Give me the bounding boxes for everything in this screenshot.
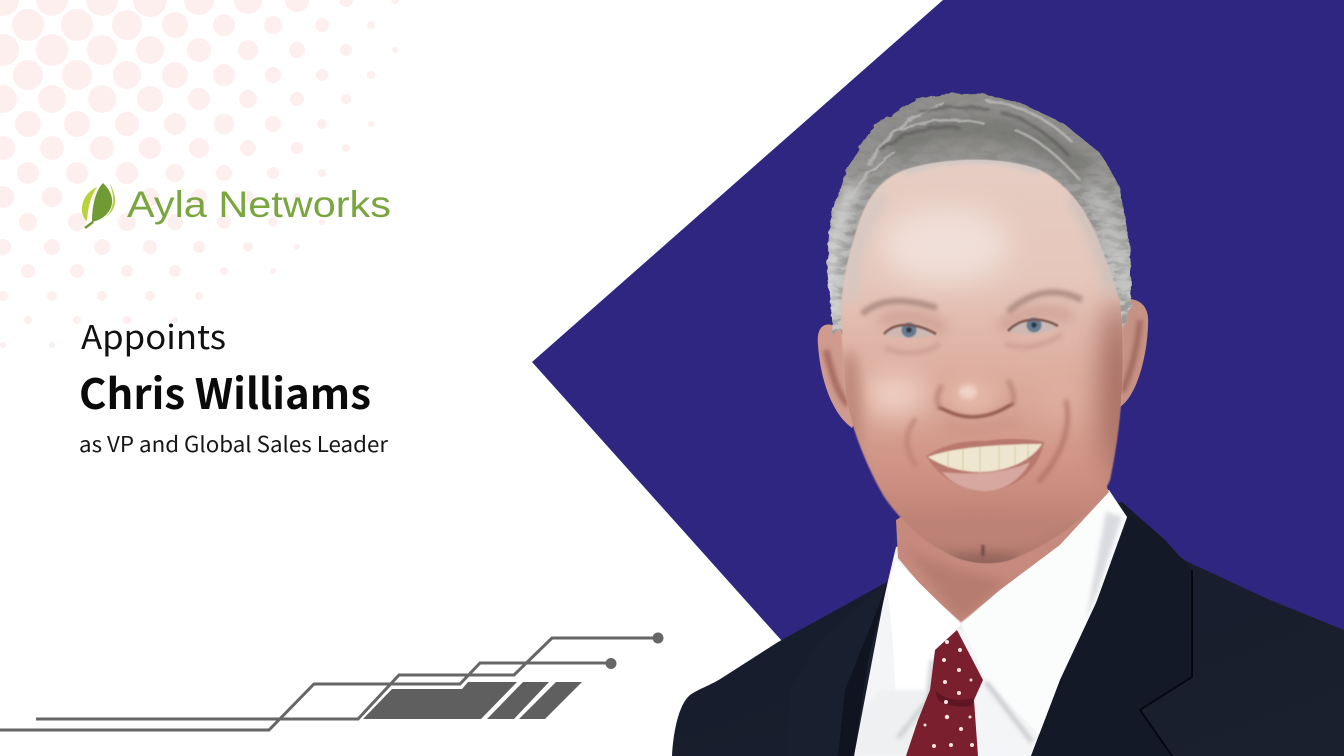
- navy diamond panel: [532, 0, 1344, 756]
- eyes: [884, 318, 1058, 338]
- logo: Ayla Networks: [82, 183, 391, 228]
- left lapel: [786, 582, 887, 756]
- text: Appoints: Appoints: [81, 311, 226, 359]
- jacket: [672, 502, 1344, 756]
- wordmark: Ayla Networks: [127, 184, 391, 225]
- heading: Chris Williams: Chris Williams: [79, 361, 371, 422]
- neck: [896, 470, 1109, 622]
- right lapel: [1031, 502, 1192, 756]
- face: [838, 160, 1136, 569]
- icon: leaf: [82, 183, 115, 228]
- circuit line graphic: [0, 632, 664, 730]
- portrait: man in suit: [672, 85, 1344, 756]
- shirt collar shading: [887, 560, 961, 738]
- halftone dot pattern: [0, 0, 399, 348]
- text: role: as VP and Global Sales Leader: [79, 428, 389, 459]
- nose: [937, 376, 1020, 429]
- hair: [826, 92, 1132, 335]
- mouth: [926, 439, 1044, 491]
- shirt: [854, 490, 1127, 756]
- ears: [818, 325, 865, 428]
- eyebrows: [862, 301, 937, 314]
- necktie: [906, 630, 983, 756]
